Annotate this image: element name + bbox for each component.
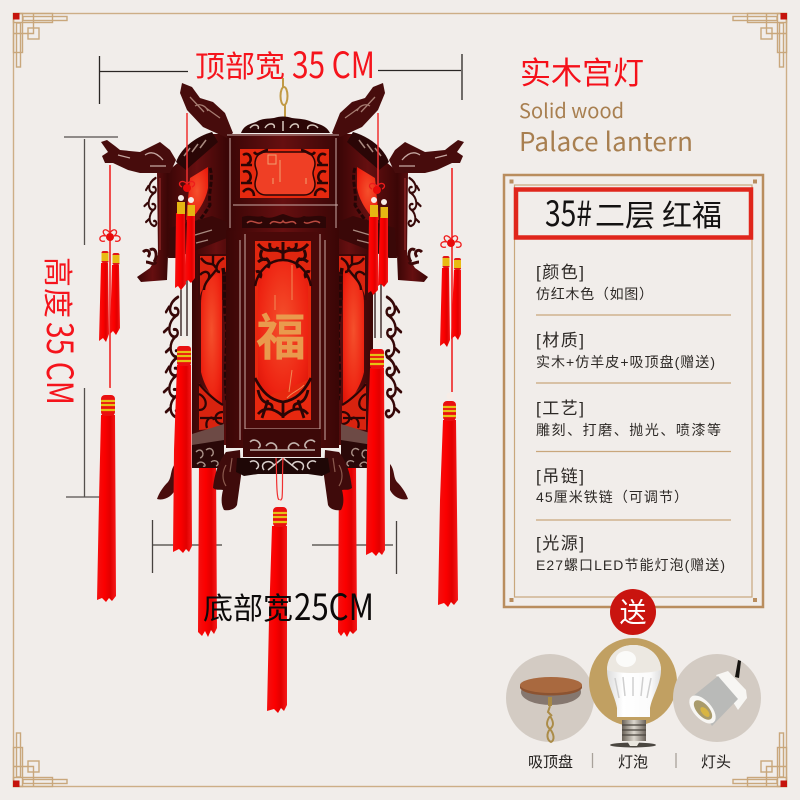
gift labels: 灯头 xyxy=(701,754,731,771)
outer left hanging knot and tassels xyxy=(99,165,120,388)
spec: light source: [光源] xyxy=(536,534,584,553)
spec: light source xyxy=(536,534,725,573)
spec: chain: [吊链] xyxy=(536,467,584,486)
bottom width label xyxy=(203,579,374,631)
outer right hanging knot and tassels xyxy=(440,168,461,392)
model name box: 红福 xyxy=(662,200,722,233)
gift: light bulb xyxy=(589,638,677,748)
spec: material: 实木+仿羊皮+吸顶盘(赠送) xyxy=(536,354,715,370)
gift badge xyxy=(610,589,656,635)
panel: product specs xyxy=(504,175,763,607)
outer left long tassel xyxy=(97,388,116,602)
福 character: 福 xyxy=(256,310,306,366)
lantern mirrored side parts xyxy=(101,83,464,510)
spec: material: [材质] xyxy=(536,331,584,350)
top crest xyxy=(241,116,330,133)
top width label xyxy=(195,37,375,89)
spec: material xyxy=(536,331,715,370)
lower tier base band xyxy=(243,429,321,457)
subtitle line 2: Palace lantern xyxy=(519,122,693,159)
height label: 高度 xyxy=(40,257,73,318)
lantern body xyxy=(101,83,464,510)
spec: light source: E27螺口LED节能灯泡(赠送) xyxy=(536,557,725,573)
model name box xyxy=(516,186,751,238)
gift labels: 灯泡 xyxy=(618,754,648,771)
spec: chain xyxy=(536,467,688,505)
spec: craft xyxy=(536,399,721,438)
spec: chain: 45厘米铁链（可调节） xyxy=(536,489,688,505)
tassels behind lantern xyxy=(198,462,357,637)
spec: craft: 雕刻、打磨、抛光、喷漆等 xyxy=(536,422,721,438)
hanging chain xyxy=(280,78,288,117)
height label: 35 CM xyxy=(36,322,88,405)
gift labels xyxy=(528,753,731,771)
model name box: 35# xyxy=(545,186,592,237)
spec: color: 仿红木色（如图） xyxy=(536,286,653,302)
gift: lamp holder xyxy=(673,654,761,742)
dimension lines xyxy=(64,54,462,574)
model name box: 二层 xyxy=(595,200,655,233)
height label xyxy=(36,257,88,405)
center tassel xyxy=(267,458,287,713)
inner mid-level tassels xyxy=(173,222,385,556)
upper tier window xyxy=(240,149,329,198)
top width label: 顶部宽 xyxy=(195,51,285,84)
gift: ceiling plate xyxy=(506,654,594,742)
upper left tassel pair on lantern xyxy=(175,113,195,290)
spec: craft: [工艺] xyxy=(536,399,584,418)
gift labels: 吸顶盘 xyxy=(528,753,573,771)
bottom width label: 底部宽 xyxy=(203,593,293,626)
lower tier lantern panel xyxy=(255,241,311,420)
lower tier front frame xyxy=(226,230,339,448)
gift badge: 送 xyxy=(620,598,646,628)
upper right tassel pair on lantern xyxy=(368,113,388,295)
title: 实木宫灯 xyxy=(520,56,644,91)
outer right long tassel xyxy=(438,392,458,607)
lower black lace skirt xyxy=(236,458,330,476)
spec: color: [颜色] xyxy=(536,263,584,282)
upper tier front frame xyxy=(227,134,339,231)
panel frame xyxy=(504,175,763,607)
spec: color xyxy=(536,263,653,302)
bottom width label: 25CM xyxy=(294,579,374,631)
subtitle line 1: Solid wood xyxy=(519,95,624,124)
top width label: 35 CM xyxy=(292,37,375,89)
upper tier lace band xyxy=(242,214,326,228)
